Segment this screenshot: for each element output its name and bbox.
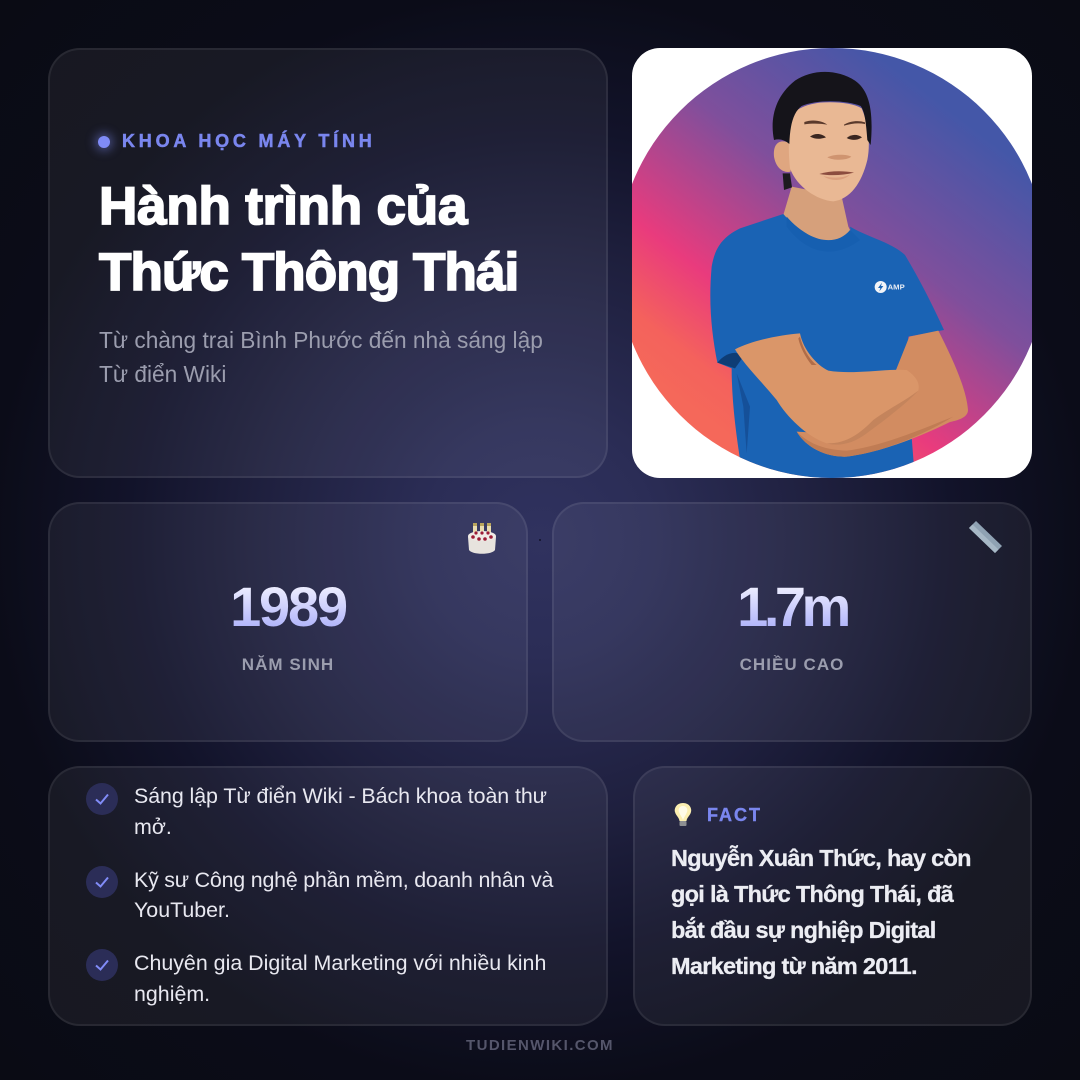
neck [784, 186, 850, 240]
eyebrow label: KHOA HỌC MÁY TÍNH [122, 131, 376, 151]
stat value: height: 1.7m [737, 575, 847, 638]
title [98, 177, 518, 302]
list item 3 [86, 949, 546, 1006]
stat value: height [642, 575, 942, 639]
nose [827, 155, 851, 160]
title: Thức Thông Thái [99, 243, 518, 302]
portrait photo: AMP [888, 283, 905, 292]
stat value: 1989: 1989 [230, 575, 346, 638]
fact text: gọi là Thức Thông Thái, đã [671, 881, 953, 907]
fact text [671, 845, 971, 980]
list item 1 [86, 783, 547, 839]
list item 1: Sáng lập Từ điển Wiki - Bách khoa toàn thư [134, 784, 547, 808]
front arm [735, 333, 919, 443]
panel: fact card [633, 766, 1032, 1026]
hair [773, 72, 872, 145]
logo on shirt [875, 281, 887, 293]
fact text: bắt đầu sự nghiệp Digital [671, 917, 936, 943]
list item 2: YouTuber. [134, 898, 230, 922]
subtitle [99, 327, 543, 387]
icon: ruler [969, 521, 1002, 553]
stat label: birth year: NĂM SINH [242, 655, 334, 674]
stat label: height: CHIỀU CAO [740, 655, 844, 674]
fact text: Marketing từ năm 2011. [671, 953, 917, 979]
check icon [86, 866, 118, 898]
shirt [710, 214, 944, 480]
panel: height stat [552, 502, 1032, 742]
list item 2 [86, 866, 554, 922]
icon: cake [468, 523, 496, 554]
tiny speck [539, 539, 541, 541]
shirt folds [717, 353, 743, 368]
panel: birth year stat [48, 502, 528, 742]
fact text: Nguyễn Xuân Thức, hay còn [671, 845, 971, 871]
mouth [819, 171, 854, 175]
subtitle: Từ chàng trai Bình Phước đến nhà sáng lập [99, 327, 543, 353]
check icon [86, 783, 118, 815]
lower forearm [797, 331, 968, 457]
eyes [810, 134, 826, 139]
title: Hành trình của [99, 177, 467, 236]
fact label: FACT [707, 805, 762, 825]
icon: light bulb [674, 803, 692, 826]
ear [774, 141, 791, 172]
portrait photo [632, 48, 1032, 478]
list item 2: Kỹ sư Công nghệ phần mềm, doanh nhân và [134, 868, 553, 892]
subtitle: Từ điển Wiki [99, 361, 226, 387]
footer: TUDIENWIKI.COM [466, 1037, 614, 1054]
head [789, 102, 869, 201]
panel: hero card [48, 48, 608, 478]
list item 3: nghiệm. [134, 982, 210, 1006]
check icon [86, 949, 118, 981]
eyebrow dot [98, 136, 110, 148]
list item 3: Chuyên gia Digital Marketing với nhiều kinh [134, 951, 546, 975]
stat value: 1989 [138, 575, 438, 639]
list item 1: mở. [134, 815, 172, 839]
panel: highlights list [48, 766, 608, 1026]
brows [804, 120, 827, 125]
